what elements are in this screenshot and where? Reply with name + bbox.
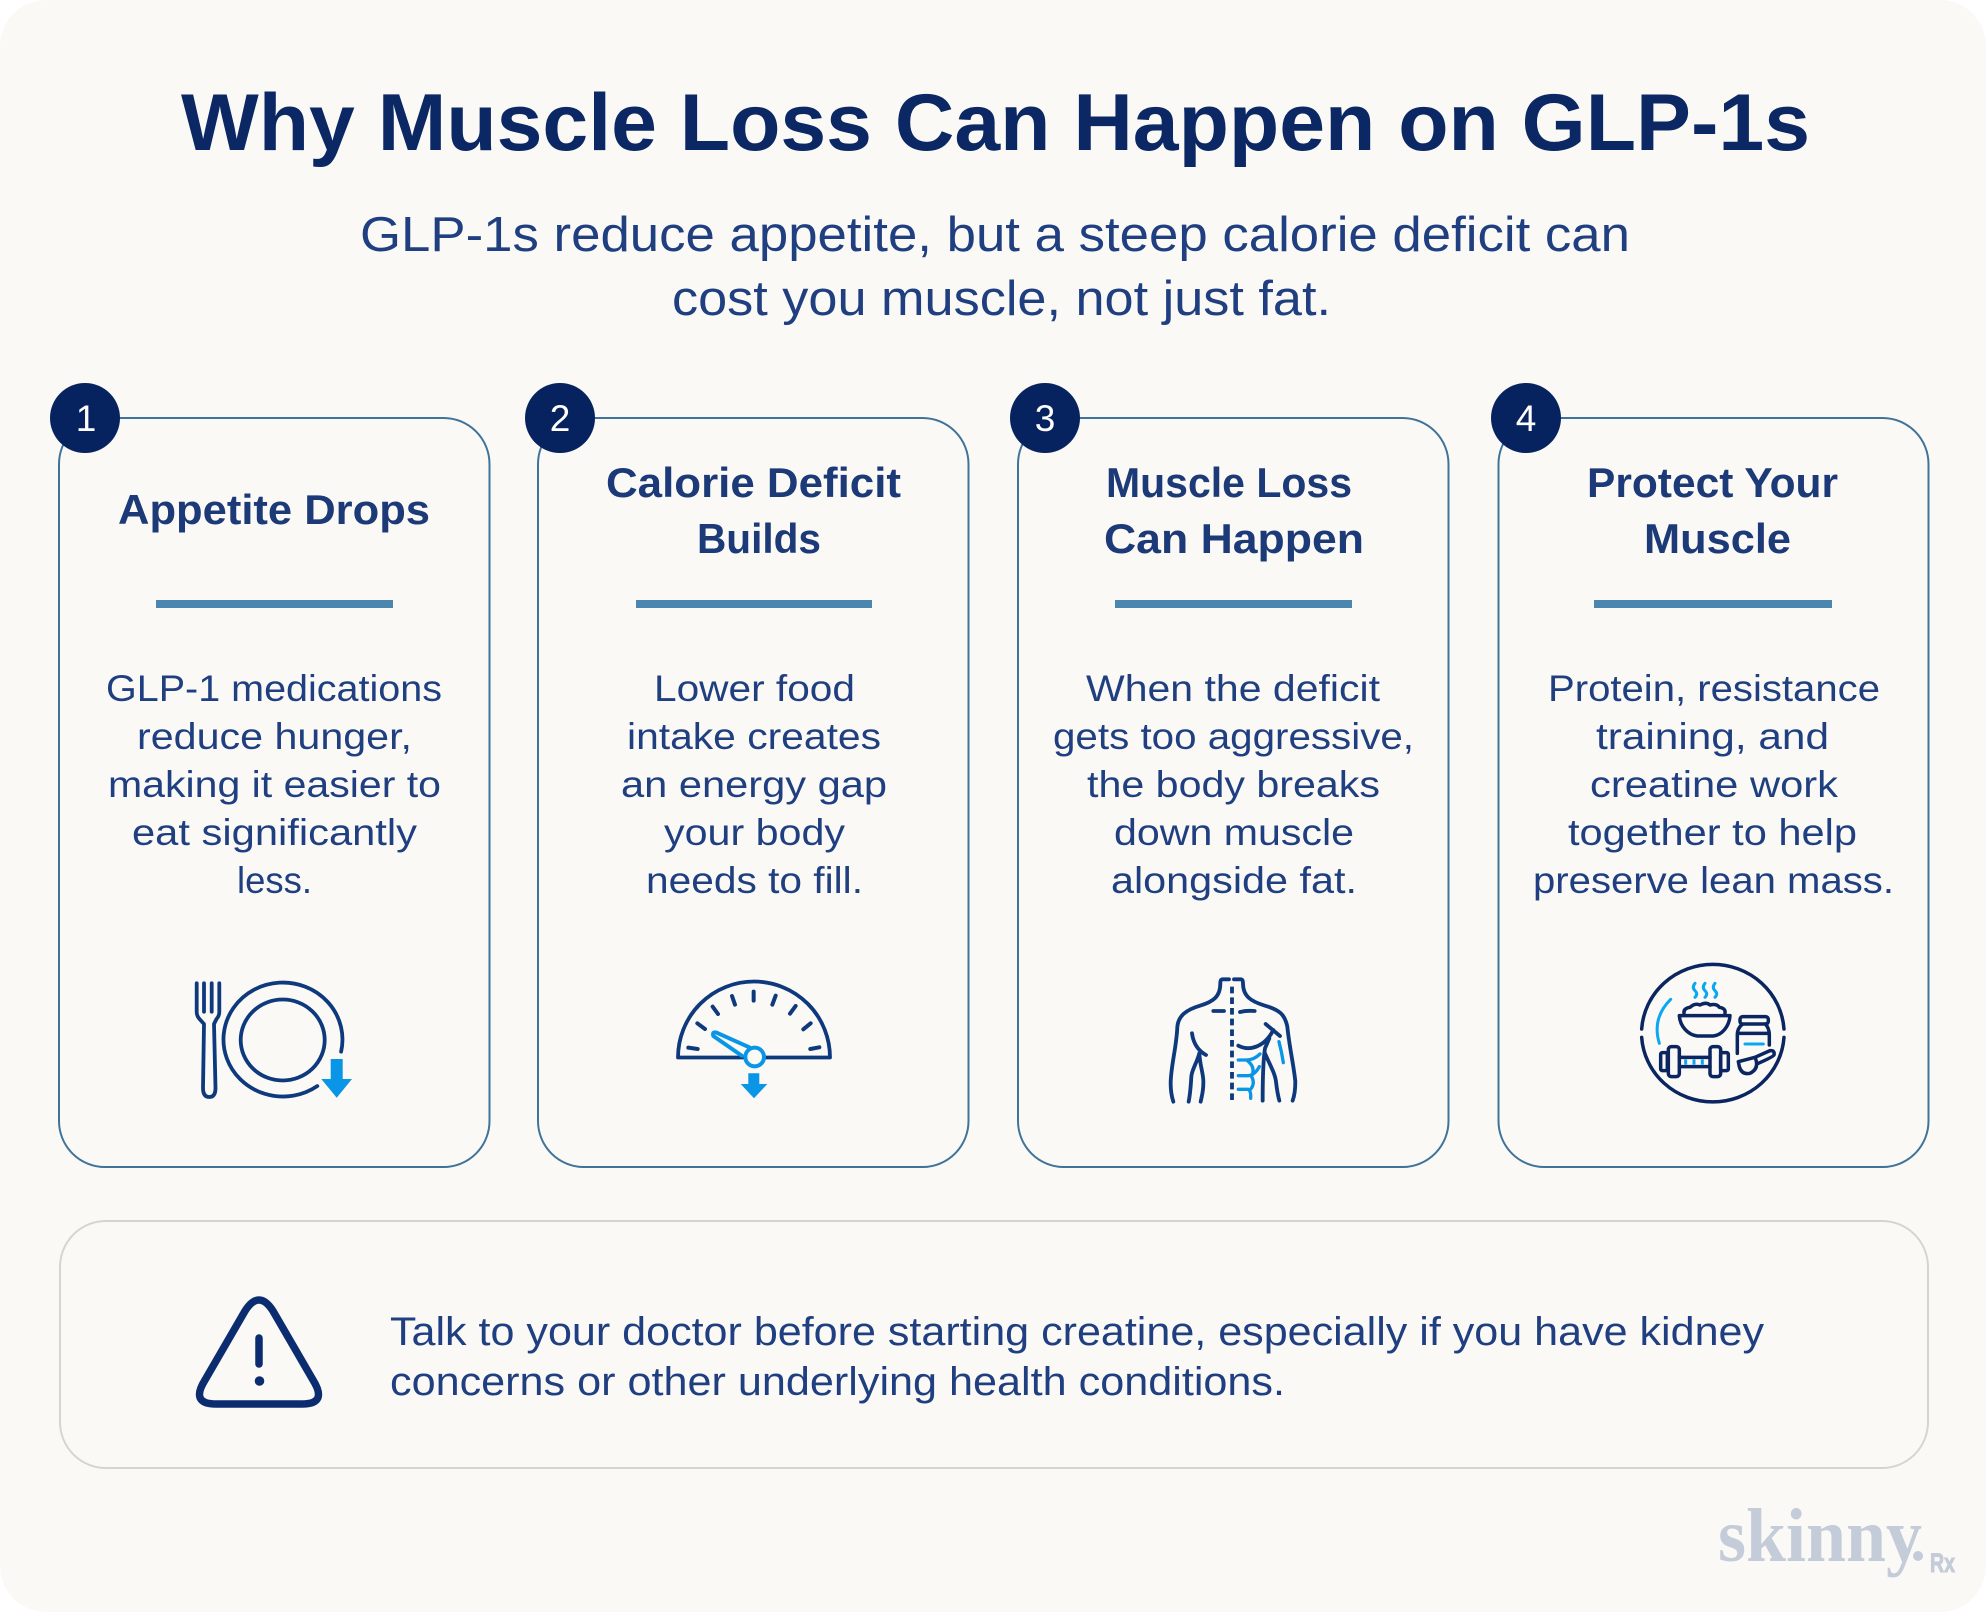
- body text: step 4: together to help: [1568, 812, 1857, 853]
- heading: calorie deficit builds: Calorie Deficit: [606, 459, 901, 506]
- callout text: [390, 1310, 1764, 1404]
- panel: step 4 protect your muscle: 4: [1516, 398, 1536, 439]
- body text: step 1: making it easier to: [108, 764, 441, 805]
- body text: step 4: creatine work: [1590, 764, 1839, 805]
- callout text: Talk to your doctor before starting creatine, especially if you have kidney: [390, 1310, 1764, 1354]
- subtitle: [360, 208, 1630, 326]
- panel: step 3 muscle loss can happen: [1010, 383, 1448, 1167]
- body text: step 3: down muscle: [1114, 812, 1354, 853]
- body text: step 4: Protein, resistance: [1548, 668, 1880, 709]
- callout: doctor warning: [60, 1221, 1928, 1468]
- heading: protect your muscle: Muscle: [1644, 515, 1791, 562]
- heading: appetite drops: Appetite Drops: [118, 486, 430, 533]
- panel: step 3 muscle loss can happen: 3: [1035, 398, 1055, 439]
- body text: step 3: the body breaks: [1087, 764, 1380, 805]
- heading: muscle loss can happen: Can Happen: [1104, 515, 1364, 562]
- icon: torso with highlighted muscles: [1171, 979, 1295, 1102]
- subtitle: cost you muscle, not just fat.: [672, 272, 1331, 326]
- heading: muscle loss can happen: [1104, 459, 1364, 562]
- body text: step 3: gets too aggressive,: [1053, 716, 1414, 757]
- body text: step 3: [1053, 668, 1414, 901]
- heading: calorie deficit builds: Builds: [697, 515, 821, 562]
- body text: step 4: training, and: [1596, 716, 1829, 757]
- logo: skinny rx: skinny: [1718, 1494, 1922, 1578]
- heading: protect your muscle: Protect Your: [1587, 459, 1838, 506]
- callout text: concerns or other underlying health conditions.: [390, 1360, 1285, 1404]
- panel: step 4 protect your muscle: [1491, 383, 1928, 1167]
- body text: step 3: When the deficit: [1086, 668, 1381, 709]
- body text: step 2: needs to fill.: [646, 860, 863, 901]
- subtitle: GLP-1s reduce appetite, but a steep calorie deficit can: [360, 208, 1630, 262]
- body text: step 2: intake creates: [627, 716, 881, 757]
- icon: protein bowl, dumbbell and creatine jar: [1642, 964, 1784, 1102]
- body text: step 2: Lower food: [654, 668, 855, 709]
- body text: step 4: [1533, 668, 1894, 901]
- body text: step 1: reduce hunger,: [137, 716, 412, 757]
- heading: calorie deficit builds: [606, 459, 901, 562]
- body text: step 4: preserve lean mass.: [1533, 860, 1894, 901]
- body text: step 1: eat significantly: [132, 812, 418, 853]
- icon: plate and fork with down arrow: [197, 983, 352, 1098]
- heading: muscle loss can happen: Muscle Loss: [1106, 459, 1352, 506]
- panel: step 2 calorie deficit builds: [525, 383, 968, 1167]
- body text: step 3: alongside fat.: [1111, 860, 1357, 901]
- panel: step 1 appetite drops: 1: [76, 398, 96, 439]
- heading: protect your muscle: [1587, 459, 1838, 562]
- body text: step 2: an energy gap: [621, 764, 887, 805]
- body text: step 1: [106, 668, 442, 901]
- panel: step 2 calorie deficit builds: 2: [550, 398, 570, 439]
- body text: step 1: less.: [237, 860, 312, 901]
- body text: step 2: [621, 668, 887, 901]
- icon: speedometer gauge with down arrow: [678, 981, 830, 1098]
- body text: step 1: GLP-1 medications: [106, 668, 442, 709]
- panel: step 1 appetite drops: [50, 383, 490, 1167]
- icon: warning triangle: [200, 1300, 318, 1404]
- body text: step 2: your body: [664, 812, 846, 853]
- logo: skinny rx: Rx: [1930, 1548, 1955, 1578]
- title: Why Muscle Loss Can Happen on GLP-1s: [181, 78, 1810, 168]
